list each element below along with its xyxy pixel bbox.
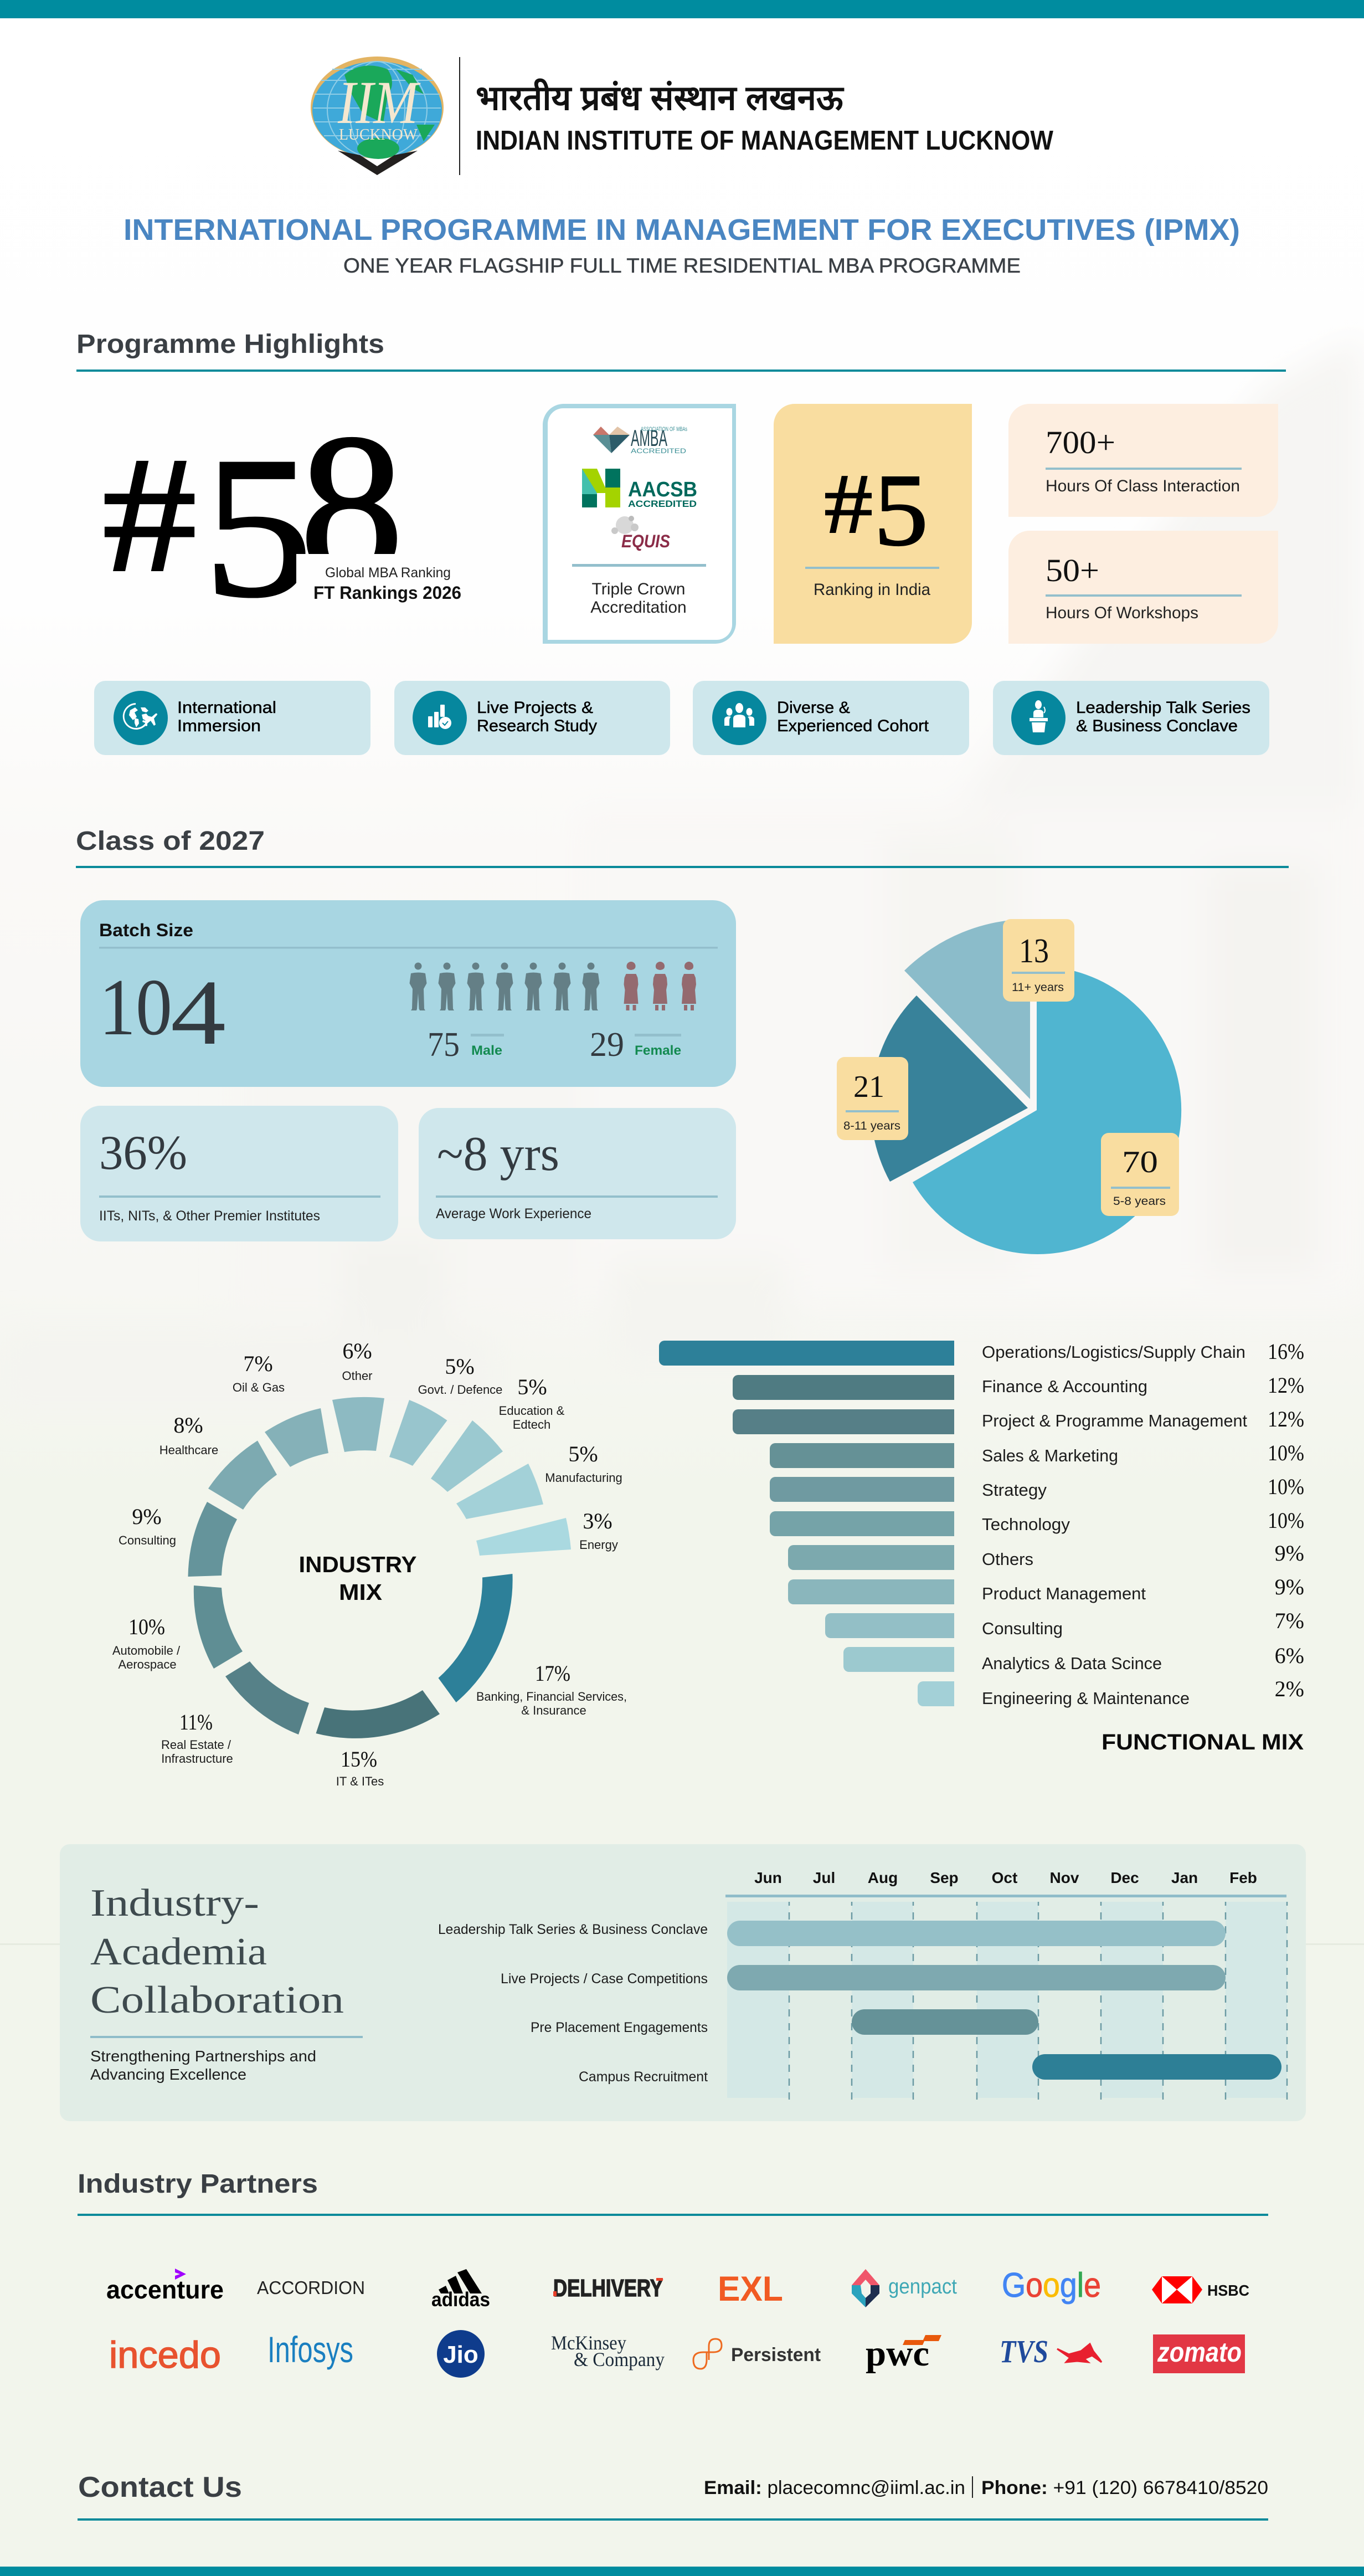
gantt months (754, 1869, 1257, 1886)
panel: global ranking: # (102, 423, 197, 606)
institute name in Hindi: भारतीय प्रबंध संस्थान लखनऊ (476, 78, 845, 117)
feature pill: international immersion (94, 681, 370, 755)
header divider (459, 57, 460, 175)
panel: global ranking: 8 (300, 392, 404, 619)
panel: hours of workshops: Hours Of Workshops (1046, 604, 1198, 622)
feature pill: live projects: Research Study (477, 717, 597, 735)
donut labels: Real Estate / (161, 1738, 231, 1752)
stat: female count (590, 1026, 681, 1064)
feature pill: international immersion: Immersion (177, 717, 261, 735)
logo: AACSB: AACSB (628, 478, 697, 501)
panel: batch size (80, 900, 736, 1087)
header: institute logo: IIM (337, 69, 421, 136)
bar values: 12% (1268, 1373, 1304, 1398)
gantt months: Aug (868, 1869, 898, 1886)
donut labels: 11% (179, 1710, 213, 1735)
feature pill: international immersion: International (177, 699, 276, 717)
bar values: 12% (1268, 1407, 1304, 1431)
gantt months: Dec (1110, 1869, 1139, 1886)
contact details (704, 2476, 1268, 2498)
bar labels: Sales & Marketing (982, 1446, 1118, 1465)
bar values: 10% (1268, 1474, 1304, 1499)
feature pill: diverse cohort: Experienced Cohort (777, 717, 929, 735)
heading: Industry Partners: Industry Partners (78, 2169, 318, 2199)
donut labels: Oil & Gas (233, 1381, 285, 1394)
logo: McKinsey: McKinsey (551, 2332, 626, 2354)
panel: global ranking: FT Rankings 2026 (313, 583, 461, 603)
panel: hours of class interaction: Hours Of Class Interaction (1046, 477, 1240, 495)
bar values: 7% (1275, 1608, 1304, 1633)
donut labels: 9% (132, 1504, 162, 1529)
donut labels: Other (342, 1369, 373, 1383)
logo: Infosys: Infosys (267, 2329, 353, 2370)
bar values: 2% (1275, 1676, 1304, 1701)
donut labels: Infrastructure (161, 1752, 233, 1766)
gantt months: Jun (754, 1869, 782, 1886)
collaboration title: Industry- (90, 1882, 259, 1925)
institute name in English: INDIAN INSTITUTE OF MANAGEMENT LUCKNOW (476, 126, 1054, 156)
logo: McKinsey (551, 2332, 665, 2370)
chart: industry mix donut (112, 1338, 627, 1788)
gantt months: Jan (1171, 1869, 1198, 1886)
logo: Zomato: zomato (1157, 2337, 1242, 2368)
panel: triple crown accreditation: Accreditation (590, 598, 687, 617)
stat: male count: Male (471, 1043, 502, 1058)
label: 5-8 years: 70 (1122, 1145, 1158, 1179)
label: 5-8 years: 5-8 years (1113, 1195, 1166, 1208)
feature pill: live projects: Live Projects & (477, 699, 593, 717)
logo: AMBA: ACCREDITED (631, 447, 686, 455)
bar values: 10% (1268, 1508, 1304, 1533)
bar values (1268, 1339, 1304, 1701)
donut labels: & Insurance (521, 1703, 586, 1717)
header: institute logo (311, 57, 444, 175)
feature pill: leadership talk series: & Business Conclave (1076, 717, 1238, 735)
logo: McKinsey: & Company (574, 2348, 665, 2370)
donut labels: Education & (499, 1404, 565, 1418)
donut labels: 5% (517, 1374, 547, 1399)
gantt row labels: Pre Placement Engagements (531, 2020, 708, 2035)
bar labels: Project & Programme Management (982, 1411, 1247, 1430)
partner logos (106, 2266, 1249, 2378)
gantt bars (727, 1921, 1281, 2080)
donut labels: 6% (342, 1338, 372, 1363)
panel: ranking in India: Ranking in India (814, 581, 930, 599)
gantt months: Nov (1050, 1869, 1079, 1886)
logo: AACSB (582, 469, 697, 509)
bottom bar (0, 2567, 1364, 2576)
header: institute logo: LUCKNOW (339, 126, 418, 143)
donut labels: Govt. / Defence (418, 1383, 502, 1397)
stat: male count (428, 1026, 504, 1064)
donut labels: 15% (341, 1747, 377, 1772)
feature pill: diverse cohort: Diverse & (777, 699, 850, 717)
donut labels: 7% (243, 1351, 273, 1376)
panel: average work experience (419, 1108, 736, 1239)
donut labels: IT & ITes (336, 1774, 384, 1788)
gantt row labels (438, 1922, 708, 2085)
logo: AACSB: ACCREDITED (628, 499, 697, 509)
label: 11+ years (1003, 919, 1074, 1002)
logo: Persistent (693, 2339, 821, 2369)
gantt row labels: Live Projects / Case Competitions (501, 1971, 708, 1987)
donut labels: Energy (579, 1538, 618, 1552)
gantt months: Jul (813, 1869, 835, 1886)
panel: premier institutes: IITs, NITs, & Other Premier Institutes (99, 1208, 320, 1224)
panel: triple crown accreditation (543, 404, 736, 644)
icon: bar chart with check (428, 705, 451, 729)
bar labels: Operations/Logistics/Supply Chain (982, 1342, 1245, 1362)
chart: work experience pie (837, 919, 1181, 1254)
stat: female count: 29 (590, 1026, 624, 1064)
bar labels: Finance & Accounting (982, 1377, 1147, 1396)
logo: AMBA (593, 425, 687, 455)
chart: functional mix bars (659, 1339, 1304, 1754)
donut labels: Edtech (513, 1418, 550, 1431)
heading: Industry Partners (78, 2169, 1268, 2216)
collaboration title (90, 1882, 344, 2021)
collaboration title: Academia (90, 1931, 267, 1973)
gantt row labels: Leadership Talk Series & Business Conclave (438, 1922, 708, 1937)
functional mix title: FUNCTIONAL MIX (1102, 1730, 1304, 1754)
donut labels: 17% (535, 1661, 570, 1686)
label: 11+ years: 13 (1019, 932, 1049, 970)
panel: batch size: Batch Size (99, 920, 193, 940)
contact details: Phone: +91 (120) 6678410/8520 (981, 2477, 1268, 2498)
panel: ranking in India: # (824, 457, 873, 551)
donut labels (112, 1338, 627, 1788)
gantt row labels: Campus Recruitment (579, 2069, 708, 2085)
heading: Contact Us (78, 2471, 1268, 2521)
icon: people group (724, 703, 754, 727)
logo: Jio: Jio (443, 2341, 478, 2368)
donut center title (299, 1552, 416, 1605)
collaboration subtitle: Strengthening Partnerships and (90, 2048, 316, 2065)
donut center title: INDUSTRY (299, 1552, 416, 1577)
heading: Programme Highlights: Programme Highlights (76, 330, 384, 359)
panel: batch size: 10 (99, 962, 172, 1052)
icons: female figures (624, 962, 696, 1010)
feature pill: leadership talk series: Leadership Talk Series (1076, 699, 1250, 717)
bar labels (982, 1342, 1247, 1708)
gantt months: Sep (930, 1869, 959, 1886)
panel: triple crown accreditation: Triple Crown (592, 580, 685, 598)
logo: TVS: TVS (1000, 2333, 1048, 2369)
panel: hours of workshops (1008, 531, 1278, 644)
panel: hours of class interaction: 700+ (1046, 424, 1115, 460)
collaboration title: Collaboration (90, 1979, 344, 2021)
logo: PwC: pwc (866, 2333, 929, 2374)
donut labels: Banking, Financial Services, (476, 1690, 627, 1703)
logo: Persistent: Persistent (731, 2344, 821, 2365)
logo: HSBC (1152, 2276, 1249, 2303)
label: 8-11 years: 8-11 years (843, 1120, 900, 1132)
icon: podium speaker (1030, 700, 1048, 732)
main title: INTERNATIONAL PROGRAMME IN MANAGEMENT FOR EXECUTIVES (IPMX) (123, 213, 1240, 247)
panel: hours of workshops: 50+ (1046, 552, 1099, 588)
panel: hours of class interaction (1008, 404, 1278, 517)
bar labels: Others (982, 1549, 1033, 1569)
logo: TVS (1000, 2333, 1102, 2369)
bar labels: Analytics & Data Scince (982, 1654, 1162, 1673)
icons: male figures (410, 963, 599, 1010)
feature pill: diverse cohort (693, 681, 969, 755)
feature pill: live projects (394, 681, 670, 755)
subtitle: ONE YEAR FLAGSHIP FULL TIME RESIDENTIAL MBA PROGRAMME (343, 254, 1021, 277)
logo: HSBC: HSBC (1207, 2282, 1249, 2299)
bar labels: Product Management (982, 1584, 1146, 1603)
collaboration subtitle: Advancing Excellence (90, 2066, 246, 2083)
logo: Jio (437, 2330, 485, 2378)
logo: accenture: accenture (106, 2275, 224, 2304)
logo: EQUIS (611, 516, 671, 551)
heading: Programme Highlights (76, 330, 1286, 372)
logo: Delhivery: DELHIVERY (553, 2275, 663, 2302)
donut labels: Healthcare (159, 1443, 218, 1457)
panel: average work experience: Average Work Experience (436, 1206, 591, 1222)
donut center title: MIX (339, 1579, 382, 1605)
donut labels: 3% (583, 1508, 612, 1533)
donut labels: Automobile / (112, 1644, 181, 1658)
bar values: 9% (1275, 1574, 1304, 1599)
heading: Contact Us: Contact Us (78, 2471, 242, 2503)
logo: AMBA: AMBA (631, 425, 667, 451)
gantt months: Oct (992, 1869, 1017, 1886)
logo: AMBA: ASSOCIATION OF MBAs (641, 426, 687, 433)
feature pill: leadership talk series (993, 681, 1269, 755)
logo: Genpact: genpact (888, 2275, 957, 2298)
bar values: 6% (1275, 1643, 1304, 1668)
logo: Genpact (852, 2269, 957, 2307)
bar values: 10% (1268, 1440, 1304, 1465)
panel: global ranking: 5 (203, 415, 313, 639)
bar values: 16% (1268, 1339, 1304, 1364)
logo: EQUIS: EQUIS (621, 531, 671, 551)
bar labels: Strategy (982, 1480, 1047, 1500)
panel: premier institutes: 36% (99, 1126, 187, 1180)
panel: ranking in India: 5 (874, 453, 928, 567)
panel: ranking in India (774, 404, 972, 644)
panel: global ranking: Global MBA Ranking (325, 565, 451, 581)
panel: global ranking (102, 392, 468, 639)
bar labels: Engineering & Maintenance (982, 1689, 1190, 1708)
panel: premier institutes (80, 1106, 398, 1241)
panel: industry-academia collaboration (60, 1844, 1306, 2121)
donut labels: 10% (128, 1614, 165, 1639)
logo: Accordion: ACCORDION (257, 2277, 365, 2298)
donut labels: Manufacturing (545, 1471, 622, 1485)
contact details: Email: placecomnc@iiml.ac.in (704, 2477, 965, 2498)
gantt months: Feb (1229, 1869, 1257, 1886)
logo: adidas (431, 2269, 490, 2311)
bar values: 9% (1275, 1541, 1304, 1566)
logo: EXL: EXL (718, 2270, 783, 2308)
heading: Class of 2027: Class of 2027 (76, 827, 265, 856)
donut labels: Consulting (119, 1533, 176, 1547)
stat: female count: Female (635, 1043, 681, 1058)
label: 8-11 years: 21 (853, 1070, 884, 1104)
donut labels: 5% (568, 1441, 598, 1466)
logo: Incedo: incedo (109, 2334, 221, 2376)
donut labels: 8% (173, 1413, 203, 1438)
logo: Google: Google (1002, 2266, 1101, 2305)
label: 5-8 years (1101, 1133, 1179, 1216)
bar labels: Consulting (982, 1619, 1063, 1638)
icon: globe and plane (123, 703, 157, 730)
bar labels: Technology (982, 1515, 1070, 1534)
panel: batch size: 4 (171, 961, 226, 1064)
stat: male count: 75 (428, 1026, 460, 1064)
donut labels: Aerospace (118, 1658, 177, 1671)
collaboration subtitle (90, 2048, 316, 2083)
label: 11+ years: 11+ years (1012, 981, 1064, 994)
donut labels: 5% (445, 1354, 475, 1379)
panel: average work experience: ~8 yrs (437, 1127, 559, 1181)
heading: Class of 2027 (76, 827, 1289, 868)
gantt column stripes (727, 1902, 1287, 2098)
label: 8-11 years (837, 1057, 908, 1140)
top bar (0, 0, 1364, 18)
logo: adidas: adidas (431, 2288, 490, 2311)
